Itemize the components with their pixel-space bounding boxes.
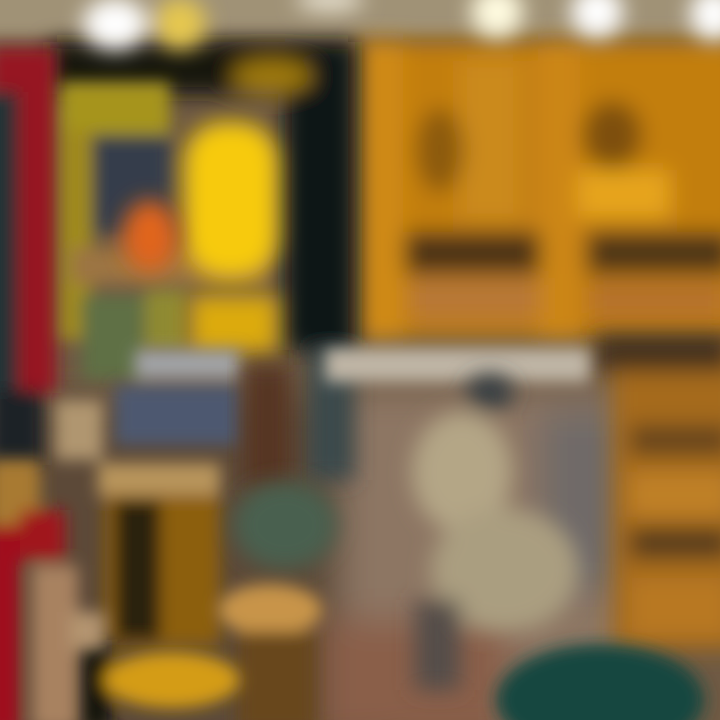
- yellow frame with dark window: [60, 82, 267, 380]
- right orange wooden shelving: [358, 40, 720, 340]
- bottom-left red chair: [0, 460, 105, 720]
- right-hand small table: [218, 584, 322, 720]
- ceiling lights: [83, 0, 720, 50]
- right lower shelves: [596, 335, 720, 650]
- top ceiling strip: [0, 0, 720, 38]
- bright yellow panel: [184, 122, 278, 353]
- pale horizontal light strips: [115, 348, 590, 445]
- left round table: [55, 400, 220, 645]
- yellow stool: [78, 640, 240, 720]
- dark central column and header band: [50, 42, 355, 480]
- brown post: [245, 365, 290, 490]
- dark teal seat: [496, 644, 704, 720]
- lower floor area: [0, 390, 640, 720]
- seated figure in beige: [412, 374, 579, 690]
- green stool: [233, 481, 337, 569]
- orange blob: [122, 200, 178, 272]
- left red pillar: [0, 48, 56, 465]
